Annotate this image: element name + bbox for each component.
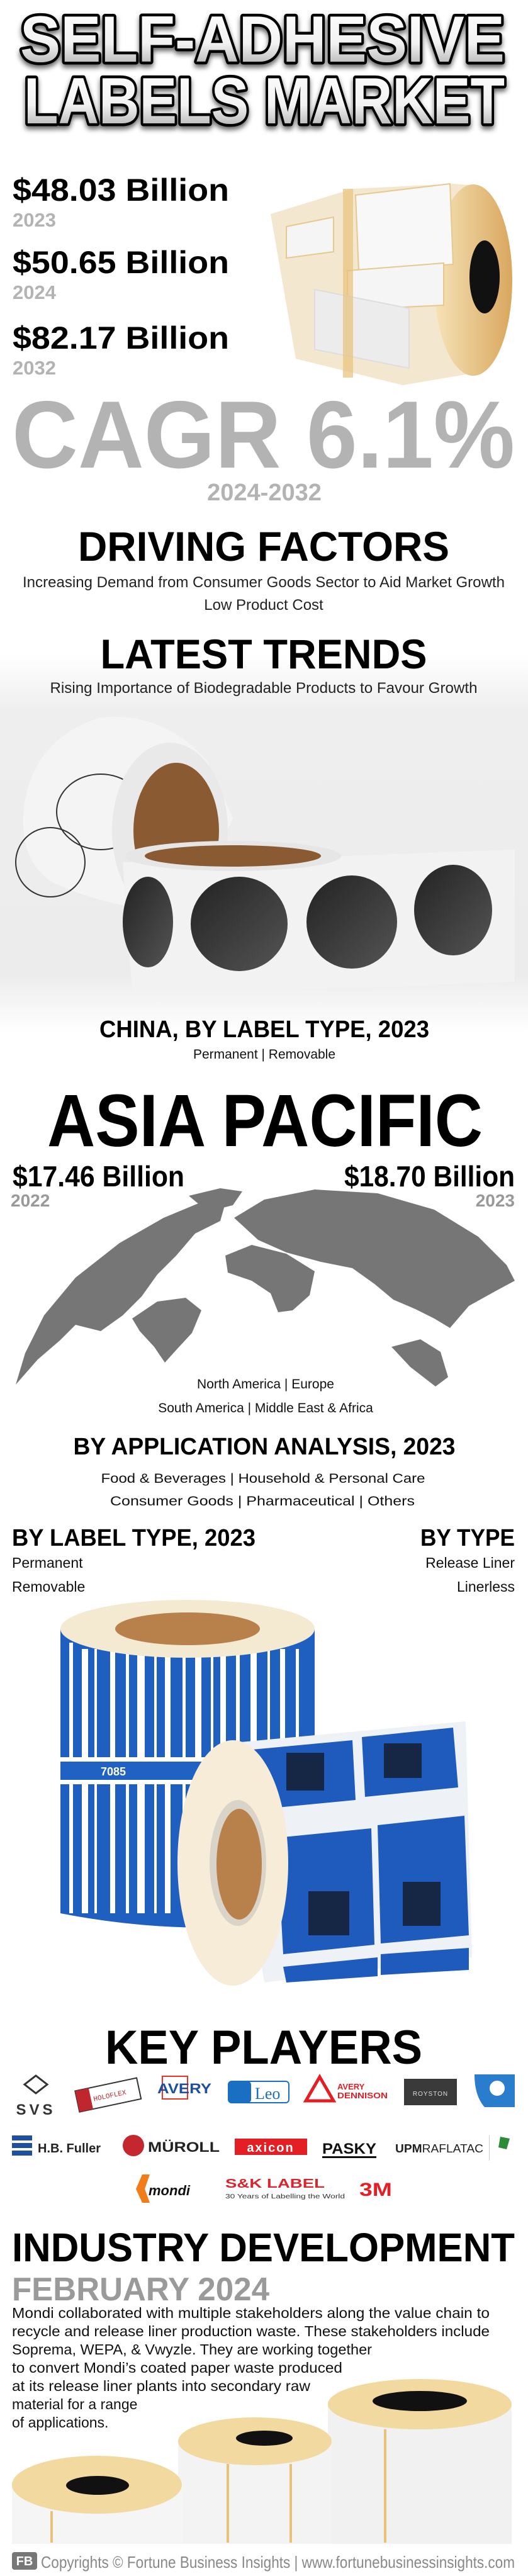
logo: upm raflatac bbox=[395, 2135, 510, 2161]
logo: s&k label: S&K LABEL bbox=[225, 2177, 325, 2191]
logos bbox=[12, 2074, 515, 2203]
logo: hb fuller: H.B. Fuller bbox=[38, 2142, 101, 2156]
region list: North America | Europe bbox=[197, 1377, 334, 1392]
logo: leo bbox=[228, 2081, 289, 2103]
logo: royston bbox=[404, 2079, 457, 2105]
logo: SVS: SVS bbox=[16, 2101, 56, 2118]
image: label roll bbox=[271, 184, 512, 385]
CAGR: CAGR 6.1% bbox=[12, 381, 515, 488]
paragraph: material for a range bbox=[12, 2396, 137, 2412]
background band behind trends bbox=[0, 655, 528, 1032]
paragraph: of applications. bbox=[12, 2414, 108, 2431]
logo: avery dennison: AVERY bbox=[337, 2082, 365, 2091]
logo: leo: Leo bbox=[255, 2084, 280, 2103]
image: dot sticker rolls bbox=[16, 717, 515, 991]
regional values: 2023 bbox=[476, 1191, 515, 1210]
regional values: $17.46 Billion bbox=[13, 1160, 184, 1193]
by label type: Removable bbox=[12, 1578, 85, 1595]
heading: china by label type bbox=[99, 1016, 429, 1062]
logo: axicon: axicon bbox=[247, 2141, 295, 2155]
heading: key players: KEY PLAYERS bbox=[105, 2021, 422, 2074]
heading: china by label type: Permanent | Removable bbox=[193, 1047, 335, 1062]
logo: mondi bbox=[136, 2174, 191, 2203]
logo: avery: AVERY bbox=[157, 2081, 211, 2096]
logo: mondi: mondi bbox=[149, 2183, 191, 2198]
regional values: $18.70 Billion bbox=[344, 1160, 515, 1193]
by type: Release Liner bbox=[425, 1555, 515, 1571]
logo: axicon bbox=[235, 2139, 307, 2155]
logo: royston: ROYSTON bbox=[413, 2091, 448, 2098]
logo: SVS bbox=[16, 2076, 56, 2118]
heading: by application: Food & Beverages | Household & Personal Care bbox=[101, 1471, 425, 1486]
footer: FB bbox=[16, 2555, 33, 2568]
heading: latest trends: LATEST TRENDS bbox=[101, 631, 427, 677]
image: three label rolls bbox=[12, 2379, 512, 2544]
paragraph: recycle and release liner production waste. These stakeholders include bbox=[12, 2323, 490, 2339]
heading: industry development: FEBRUARY 2024 bbox=[12, 2271, 269, 2308]
regional values: 2022 bbox=[11, 1191, 50, 1210]
region list: South America | Middle East & Africa bbox=[158, 1401, 373, 1415]
logo: holoflex: HOLOFLEX bbox=[93, 2089, 127, 2103]
market values bbox=[13, 172, 229, 379]
world map bbox=[16, 1188, 515, 1386]
image: barcode rolls bbox=[60, 1600, 472, 1986]
market values: 2023 bbox=[13, 209, 56, 231]
heading: industry development bbox=[12, 2225, 515, 2308]
by type bbox=[420, 1525, 515, 1595]
heading: driving factors: Increasing Demand from Consumer Goods Sector to Aid Market Growth bbox=[23, 574, 505, 591]
by type: Linerless bbox=[457, 1578, 515, 1595]
heading: driving factors bbox=[23, 523, 505, 614]
by label type: Permanent bbox=[12, 1555, 83, 1571]
heading: by application: BY APPLICATION ANALYSIS, 2023 bbox=[73, 1434, 456, 1460]
paragraph bbox=[12, 2305, 490, 2431]
market values: $82.17 Billion bbox=[13, 320, 229, 356]
logo: hb fuller bbox=[12, 2135, 101, 2156]
heading: latest trends: Rising Importance of Biodegradable Products to Favour Growth bbox=[50, 680, 477, 697]
heading: latest trends bbox=[50, 631, 477, 697]
logo: muroll: MÜROLL bbox=[148, 2139, 220, 2155]
paragraph: to convert Mondi’s coated paper waste produced bbox=[12, 2359, 342, 2376]
logo: pasky: PASKY bbox=[322, 2140, 376, 2157]
paragraph: at its release liner plants into secondary raw bbox=[12, 2378, 310, 2394]
logo: upm raflatac: UPMRAFLATAC bbox=[395, 2142, 483, 2155]
by label type: BY LABEL TYPE, 2023 bbox=[12, 1525, 256, 1551]
by type: BY TYPE bbox=[420, 1525, 515, 1551]
regional values bbox=[11, 1160, 515, 1210]
by label type bbox=[12, 1525, 256, 1595]
heading: china by label type: CHINA, BY LABEL TYPE, 2023 bbox=[99, 1016, 429, 1043]
CAGR: 2024-2032 bbox=[207, 480, 322, 506]
heading: by application bbox=[73, 1434, 456, 1509]
logo: s&k label: 30 Years of Labelling the World bbox=[225, 2193, 345, 2200]
logo: 3M: 3M bbox=[359, 2179, 392, 2200]
title bbox=[20, 3, 505, 138]
market values: 2032 bbox=[13, 357, 56, 379]
market values: 2024 bbox=[13, 281, 57, 303]
heading: industry development: INDUSTRY DEVELOPMENT bbox=[12, 2225, 515, 2270]
market values: $48.03 Billion bbox=[13, 172, 229, 208]
logo: avery dennison bbox=[306, 2077, 388, 2101]
region list bbox=[158, 1377, 373, 1415]
logo: s&k label bbox=[225, 2177, 345, 2200]
heading: by application: Consumer Goods | Pharmaceutical | Others bbox=[110, 1494, 415, 1509]
logo: avery bbox=[157, 2076, 211, 2099]
logo: avery dennison: DENNISON bbox=[337, 2091, 388, 2100]
paragraph: Soprema, WEPA, & Vwyzle. They are working together bbox=[12, 2341, 372, 2358]
heading: driving factors: DRIVING FACTORS bbox=[78, 523, 449, 570]
logo: holoflex bbox=[75, 2078, 141, 2112]
image: barcode rolls: 7085 bbox=[101, 1765, 126, 1778]
heading: asia pacific: ASIA PACIFIC bbox=[47, 1079, 483, 1162]
paragraph: Mondi collaborated with multiple stakeholders along the value chain to bbox=[12, 2305, 490, 2321]
logo: muroll bbox=[123, 2135, 220, 2156]
market values: $50.65 Billion bbox=[13, 245, 229, 280]
logo: blue e bbox=[475, 2074, 515, 2107]
heading: driving factors: Low Product Cost bbox=[204, 597, 323, 614]
